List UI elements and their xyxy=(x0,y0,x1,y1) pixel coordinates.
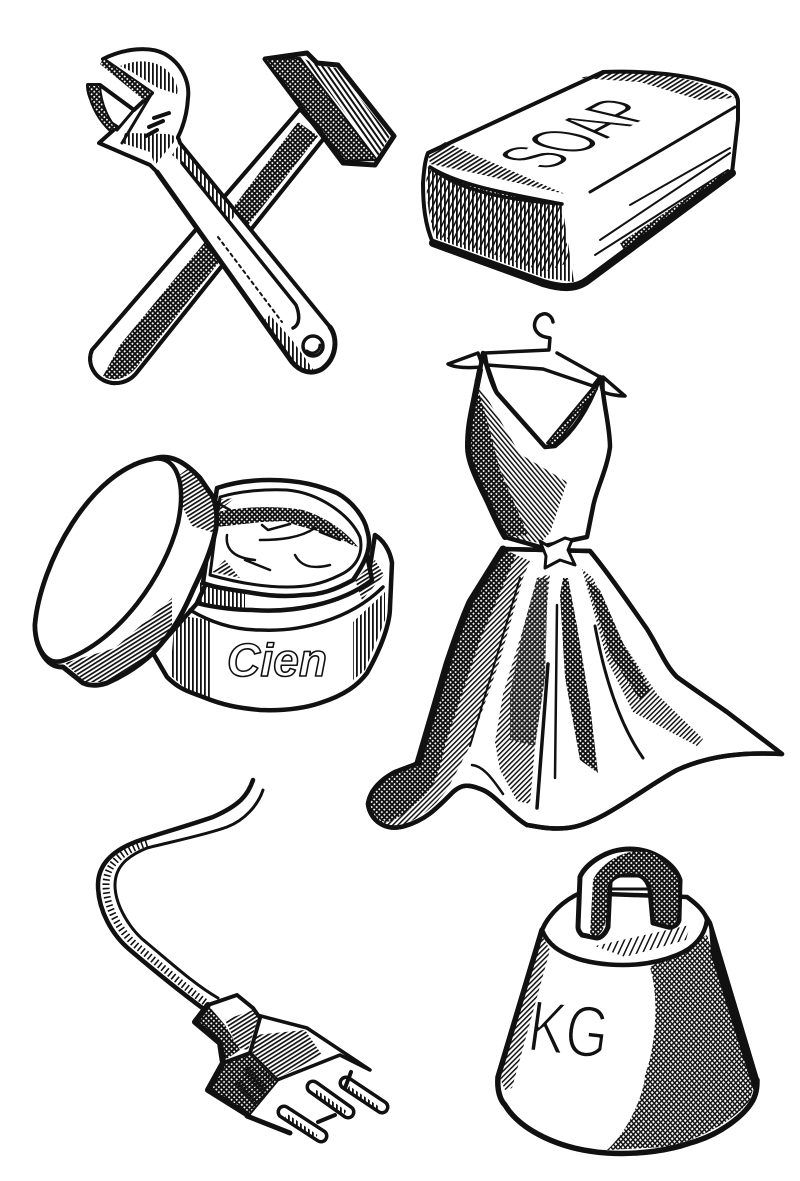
icon: soap bar xyxy=(423,72,738,287)
cord xyxy=(98,780,263,1010)
dress skirt xyxy=(368,549,782,829)
soap lettering: SOAP xyxy=(477,93,680,175)
hammer handle xyxy=(90,109,325,383)
weight lettering: KG xyxy=(524,985,614,1074)
weight handle xyxy=(610,888,650,890)
hammer head xyxy=(265,53,394,165)
icon: hammer xyxy=(90,53,394,383)
wrench outline xyxy=(88,49,335,372)
jar neck xyxy=(197,555,372,611)
icon: dress xyxy=(368,353,782,829)
plug prongs xyxy=(284,1072,382,1137)
soap top bevel hatching xyxy=(428,142,565,194)
plug body xyxy=(195,995,370,1133)
dress bow xyxy=(540,538,575,568)
cream surface xyxy=(217,507,358,547)
dress bodice xyxy=(468,353,610,547)
weight body xyxy=(498,895,757,1153)
jar opening rim xyxy=(203,480,369,596)
icon: cream jar xyxy=(35,457,392,710)
jar lid xyxy=(35,457,217,685)
icon: kilogram weight xyxy=(498,849,757,1153)
wrench adjusting slots xyxy=(146,113,169,136)
icon: adjustable wrench xyxy=(88,49,335,372)
soap front face hatching xyxy=(426,167,574,282)
icon: power cord and plug xyxy=(98,780,382,1137)
icon: hanger xyxy=(448,314,625,396)
wrench hanging hole xyxy=(303,336,323,356)
weight top face xyxy=(542,893,707,965)
jar body xyxy=(153,535,392,710)
jar label: Cien xyxy=(227,634,327,686)
